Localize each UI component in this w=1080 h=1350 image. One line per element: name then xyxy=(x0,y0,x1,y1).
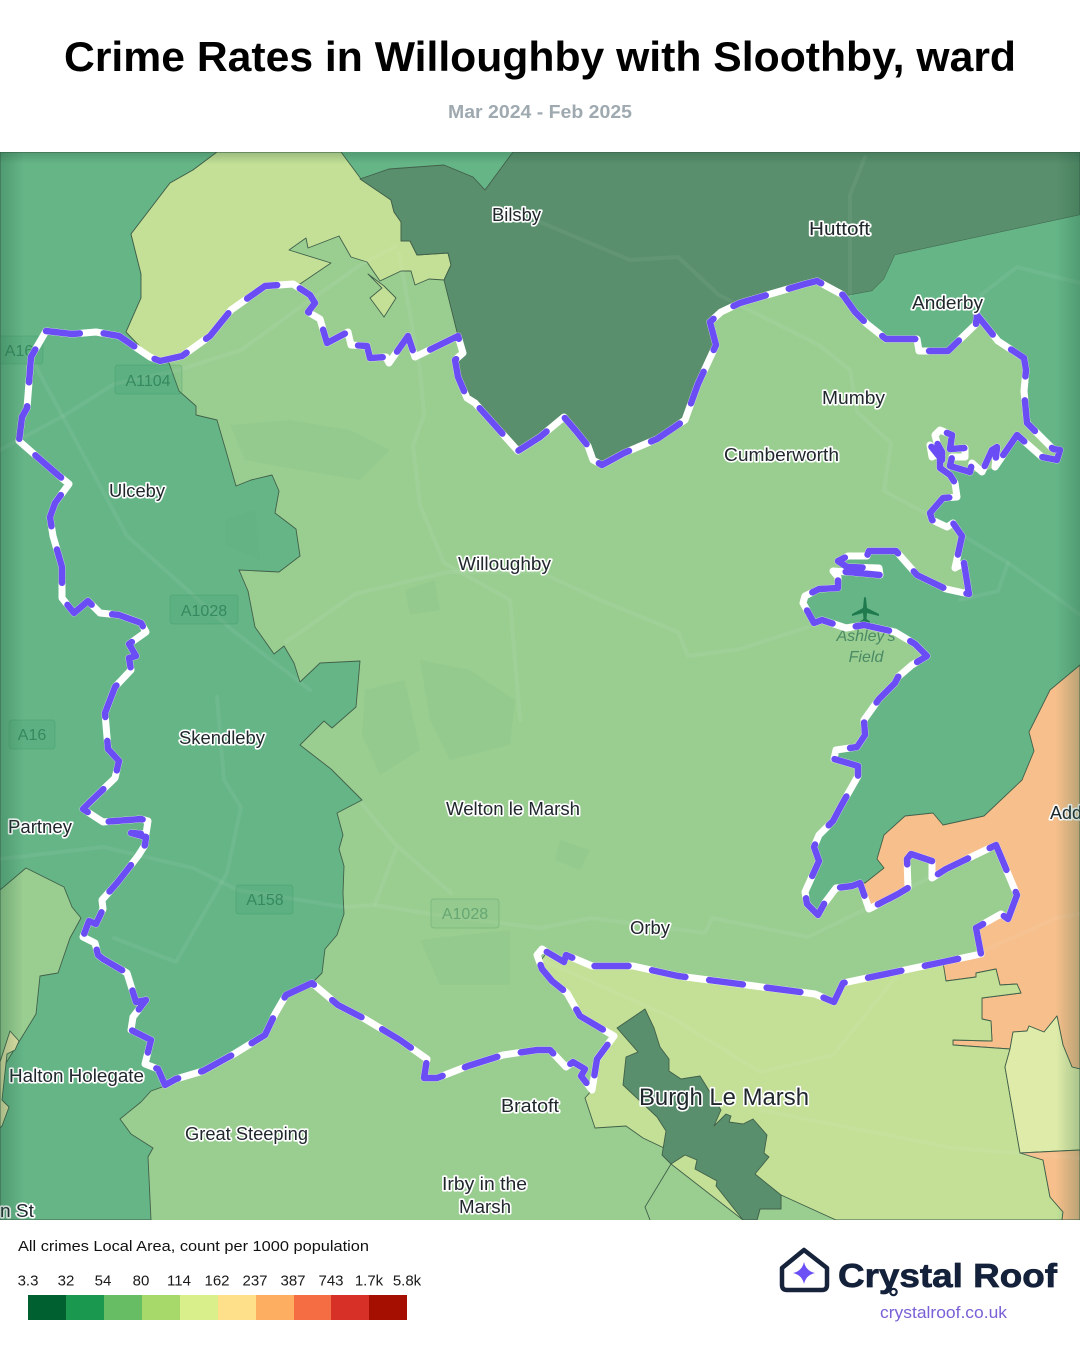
place: Skendleby: Skendleby xyxy=(179,728,265,748)
place: Irby in the Marsh: Irby in the xyxy=(442,1174,527,1194)
region: base ward colour xyxy=(120,236,1056,1220)
place: Cumberworth: Cumberworth xyxy=(724,445,839,465)
place labels xyxy=(0,205,1080,1221)
road shield: A1028 west xyxy=(170,595,238,624)
region: southeast light yellow xyxy=(1005,1016,1080,1153)
region: top centre mid green xyxy=(341,152,513,190)
place: Huttoft: Huttoft xyxy=(809,219,870,239)
region: yellow island xyxy=(368,274,396,317)
region: west mid green xyxy=(0,152,362,1220)
logo: Crystal Roof xyxy=(782,1250,1058,1322)
icon: purple star xyxy=(793,1262,815,1284)
place: Welton le Marsh: Welton le Marsh xyxy=(446,799,580,819)
legend values: 32 xyxy=(58,1272,74,1290)
legend values: 114 xyxy=(167,1272,191,1290)
subtitle: date range: Mar 2024 - Feb 2025 xyxy=(448,102,632,122)
road shield: A16 south xyxy=(9,720,55,749)
legend values: 5.8k xyxy=(393,1272,422,1290)
place: Willoughby: Willoughby xyxy=(458,554,551,574)
legend values: 54 xyxy=(95,1272,111,1290)
place: Orby: Orby xyxy=(630,918,670,938)
place: Bilsby: Bilsby xyxy=(492,205,541,225)
place: Bratoft: Bratoft xyxy=(501,1096,559,1116)
legend values: 237 xyxy=(242,1272,268,1290)
region: southwest yellow sliver xyxy=(0,1031,19,1128)
title: Crime Rates in Willoughby with Sloothby, ward xyxy=(64,33,1016,80)
place: Ulceby: Ulceby xyxy=(109,481,165,501)
logo y descender ring xyxy=(890,1289,897,1295)
region: north yellow-green xyxy=(126,152,451,361)
road shield: A1028 south xyxy=(431,899,499,928)
legend values: 387 xyxy=(280,1272,306,1290)
region: Burgh Le Marsh dark town xyxy=(617,1009,781,1220)
region: east orange xyxy=(860,665,1080,1069)
road shield: A158 xyxy=(236,885,293,914)
road shield: A16 north: A16 xyxy=(5,343,33,360)
legend values: 743 xyxy=(318,1272,344,1290)
legend values: 1.7k xyxy=(355,1272,384,1290)
brand name: Crystal Roof xyxy=(838,1257,1058,1294)
place: Irby in the Marsh: Marsh xyxy=(459,1197,511,1217)
legend values: 3.3 xyxy=(18,1272,38,1290)
boundary line south of town xyxy=(645,1164,671,1220)
road shield: A158: A158 xyxy=(246,892,284,909)
region: north dark green xyxy=(360,152,1080,465)
road shield: A1028 south: A1028 xyxy=(442,906,488,923)
region: east mid green xyxy=(803,215,1080,915)
legend values xyxy=(18,1272,422,1290)
icon: airfield plane xyxy=(852,597,879,623)
road network xyxy=(0,157,1080,1158)
ward boundary: white and purple dashed outline xyxy=(19,281,1060,1090)
place: Partney: Partney xyxy=(8,817,72,837)
place: Great Steeping: Great Steeping xyxy=(185,1124,308,1144)
place: Irby in the Marsh xyxy=(442,1174,527,1217)
legend xyxy=(18,1238,422,1320)
legend heading: All crimes Local Area, count per 1000 population xyxy=(18,1238,369,1255)
legend values: 80 xyxy=(133,1272,149,1290)
road shield: A1104 xyxy=(115,365,182,394)
choropleth map xyxy=(0,152,1080,1221)
woodland patches xyxy=(225,420,590,985)
airfield label: Ashley's Field xyxy=(836,630,895,662)
map edge shading xyxy=(0,152,1080,1220)
legend colour scale xyxy=(28,1295,407,1320)
road shield: A1028 west: A1028 xyxy=(181,603,227,620)
icon: house outline xyxy=(782,1250,827,1290)
road shield: A1104: A1104 xyxy=(125,373,171,390)
place: Burgh Le Marsh: Burgh Le Marsh xyxy=(639,1084,809,1111)
region: southwest light green xyxy=(0,868,81,1073)
region: southeast orange corner xyxy=(1020,1150,1080,1220)
place: Halton Holegate: Halton Holegate xyxy=(9,1066,144,1086)
road shield: A16 south: A16 xyxy=(18,727,46,744)
brand url: crystalroof.co.uk xyxy=(880,1304,1008,1322)
region: south yellow-green xyxy=(542,952,1063,1220)
road shield: A16 north xyxy=(0,336,43,364)
legend values: 162 xyxy=(204,1272,230,1290)
place: clipped street label: n St xyxy=(0,1201,34,1221)
place: Mumby: Mumby xyxy=(822,388,885,408)
airfield label: Ashley's Field: Ashley's xyxy=(835,628,896,645)
place: Anderby: Anderby xyxy=(912,293,983,313)
airfield label: Ashley's Field: Field xyxy=(849,649,884,666)
